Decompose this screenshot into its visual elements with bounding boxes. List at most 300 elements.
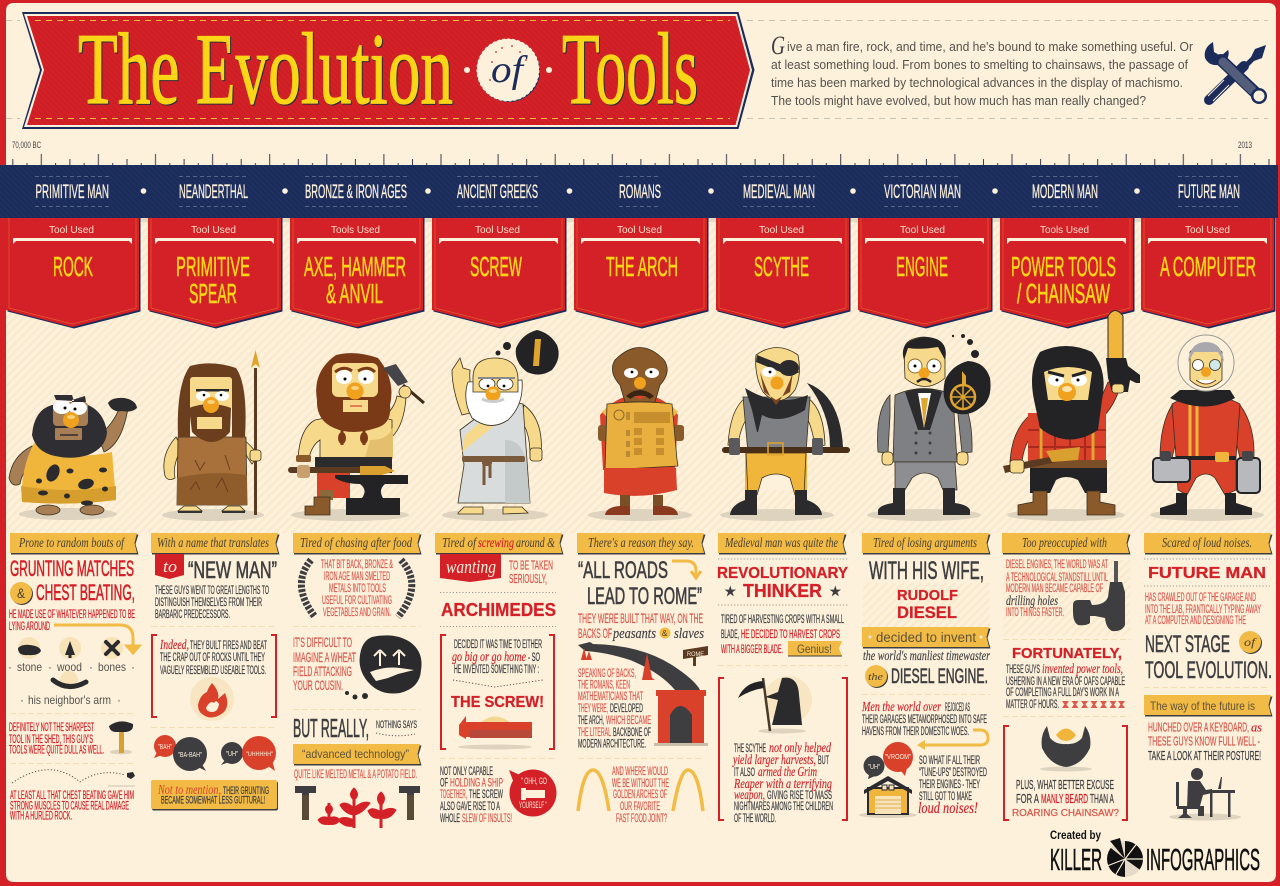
banner: rock: ROCK [53, 251, 93, 282]
column 2: neanderthal text [151, 533, 280, 810]
ribbon: genius: Genius! [797, 644, 832, 656]
icon: neighbor's arm [53, 671, 86, 689]
text: sharpest tool: DEFINITELY NOT THE SHARPEST [9, 722, 94, 734]
banner: axe hammer anvil [290, 218, 424, 328]
arrow [54, 625, 139, 653]
striped panel: rudolf diesel [863, 583, 990, 627]
wanting tag [440, 554, 501, 582]
text: insults: OF [440, 778, 448, 790]
paragraph: invented power tools, [1042, 662, 1123, 677]
labels: · [89, 660, 93, 674]
column 8: modern man text: A TECHNOLOGICAL STANDSTILL UNTIL [1006, 572, 1108, 584]
bracket panel: beard: PLUS, WHAT BETTER EXCUSE [1016, 777, 1114, 792]
bracket panel: grim reaper: BUT [818, 755, 829, 767]
script line: the world's manliest timewaster [863, 649, 990, 664]
labels: wood [56, 660, 82, 674]
bracket panel: grim reaper: THE SCYTHE [734, 743, 766, 755]
striped panel [1003, 560, 1130, 636]
intro text: ive a man fire, rock, and time, and he's bound to make something useful. Or [787, 39, 1194, 54]
callout: gutturals: BECAME SOMEWHAT LESS GUTTURAL! [161, 794, 265, 806]
ribbon [151, 533, 280, 554]
line: peasants and slaves: peasants [612, 626, 656, 642]
banner: screw: Tool Used [475, 224, 520, 236]
banner: axe hammer anvil: & ANVIL [326, 278, 383, 309]
ribbon: genius [788, 641, 842, 656]
text: wheat field: IMAGINE A WHEAT [293, 649, 356, 665]
speech bubbles: vroom [864, 742, 913, 779]
column 5: romans text: WHICH BECAME [606, 715, 651, 727]
ribbon: decided to invent: decided to invent [876, 630, 976, 645]
paragraph: STILL GOT TO MAKE [919, 791, 972, 803]
banner: the arch: THE ARCH [606, 251, 678, 282]
labels: stone [17, 660, 42, 674]
line: peasants and slaves [578, 625, 704, 642]
title text: tools: Tools [562, 13, 698, 126]
column 3: bronze and iron age text: VEGETABLES AND GRAIN. [323, 607, 391, 619]
character: medieval man [720, 348, 850, 521]
paragraph [919, 755, 987, 803]
labels: · [8, 660, 12, 674]
banner: primitive spear: SPEAR [189, 278, 237, 309]
column 5: romans text: BACKBONE OF [613, 727, 651, 739]
text: AT LEAST ALL THAT CHEST BEATING GAVE HIM [10, 790, 134, 802]
paragraph: WITH A BIGGER BLADE. [721, 644, 783, 656]
banner: screw: SCREW [470, 251, 522, 282]
heading: FORTUNATELY, [1012, 645, 1122, 662]
character: roman [588, 348, 692, 521]
of seal: of [491, 49, 528, 91]
bracket panel: the screw [441, 635, 554, 750]
logo [1107, 838, 1143, 880]
banner: scythe: Tool Used [759, 224, 804, 236]
banner: engine: Tool Used [900, 224, 945, 236]
column 5: romans text: WE BE WITHOUT THE [612, 778, 669, 790]
era navigation band: ROMANS [619, 182, 661, 203]
column 4: ancient greeks text [435, 533, 564, 825]
ribbon: way of the future [1144, 695, 1272, 716]
column 8: modern man text: MODERN MAN BECAME CAPABLE OF [1006, 583, 1103, 595]
arrow [672, 561, 701, 578]
character: victorian man [867, 334, 991, 521]
bracket panel: fire: THEY BUILT FIRES AND BEAT [190, 640, 267, 652]
icons: hourglasses [1062, 701, 1125, 708]
ribbon: way of the future: The way of the future is [1150, 699, 1255, 713]
bracket panel: grim reaper: IT ALSO [734, 767, 755, 779]
illustration: road on the backs of arches [578, 642, 708, 746]
column 6: medieval man text [717, 533, 849, 825]
bracket panel: grim reaper: NIGHTMARES AMONG THE CHILDREN [734, 801, 833, 813]
heading: ARCHIMEDES [441, 600, 556, 620]
ribbon [435, 533, 564, 554]
speech bubbles: grunts: "BA-BAH" [178, 752, 202, 759]
ribbon: With a name that translates [157, 536, 269, 551]
paragraph: THEY WERE, [578, 703, 608, 715]
title banner [22, 12, 754, 129]
paragraph: BLADE, [721, 629, 739, 641]
banner: rock: Tool Used [49, 224, 94, 236]
speech bubble: insult [509, 770, 556, 816]
banner: axe hammer anvil: AXE, HAMMER [304, 251, 406, 282]
paragraph [1148, 720, 1262, 763]
labels: bones [98, 660, 126, 674]
text: QUITE LIKE MELTED METAL & A POTATO FIELD. [294, 769, 417, 781]
bracket panel: grim reaper: not only helped [769, 741, 832, 756]
icon: fire [190, 677, 234, 721]
text: insults: ALSO GAVE RISE TO A [440, 801, 500, 813]
paragraph: OUR FAVORITE [620, 801, 660, 813]
speech bubbles: vroom: "VROOM" [885, 754, 911, 761]
text: insults: WHOLE [440, 813, 460, 825]
line: peasants and slaves: BACKS OF [578, 625, 612, 641]
to tag [155, 554, 184, 579]
era navigation band: VICTORIAN MAN [884, 182, 961, 203]
heading: THINKER [743, 581, 822, 601]
character: future man [1150, 335, 1264, 521]
text: SERIOUSLY, [509, 571, 547, 586]
column 3: bronze and iron age text: USEFUL FOR CULTIVATING [322, 595, 392, 607]
heading [10, 556, 135, 605]
icon: wood arrowhead [59, 637, 81, 659]
text: sharpest tool [9, 722, 104, 756]
intro text: G [771, 31, 785, 60]
paragraph: drilling holes [1006, 594, 1058, 609]
credit: created by killer infographics [1050, 830, 1260, 880]
bracket panel: grim reaper: Reaper with a terrifying [733, 777, 832, 792]
column 5: romans text: GOLDEN ARCHES OF [613, 789, 667, 801]
paragraph [321, 559, 393, 619]
character: primitive man [9, 395, 137, 520]
stars: ★ [829, 584, 842, 600]
ribbon: screwing [478, 536, 514, 551]
banner: primitive spear [148, 218, 282, 328]
the diesel engine [865, 665, 988, 688]
paragraph: SPEAKING OF BACKS, [578, 668, 636, 680]
ribbon [577, 533, 706, 554]
text: USHERING IN A NEW ERA OF OAFS CAPABLE [1006, 676, 1125, 688]
heading: next stage [1145, 631, 1272, 684]
speech bubbles: grunts: "BAH" [158, 744, 172, 751]
callout: gutturals [151, 780, 278, 810]
ribbon: There's a reason they say. [588, 536, 694, 551]
column 5: romans text: THEY WERE BUILT THAT WAY, ON THE [578, 610, 703, 626]
intro text: time has been marked by technological advances in the display of machismo. [771, 75, 1183, 90]
column 5: romans text: MODERN ARCHITECTURE. [578, 738, 646, 750]
ribbon: Prone to random bouts of [18, 536, 126, 551]
banner: the arch: Tool Used [617, 224, 662, 236]
heading: “NEW MAN” [188, 557, 277, 584]
ribbon: advanced technology: “advanced technology” [302, 747, 409, 761]
arm label: · [20, 693, 24, 707]
column 1: primitive man text [8, 533, 139, 822]
labels: · [131, 660, 135, 674]
of seal [464, 39, 552, 102]
bracket panel: fire: VAGUELY RESEMBLED USEABLE TOOLS. [160, 665, 266, 677]
bracket panel: the screw: THE SCREW! [451, 694, 544, 711]
tool banners [6, 218, 1276, 328]
icon: reaper [738, 676, 812, 734]
banner: engine: ENGINE [896, 251, 948, 282]
bracket panel: grim reaper [719, 676, 847, 825]
heading: REVOLUTIONARY [717, 565, 849, 582]
banner: primitive spear: PRIMITIVE [176, 251, 250, 282]
bracket panel: grim reaper: weapon, [734, 788, 765, 803]
stars [724, 584, 842, 600]
text: TO BE TAKEN [509, 558, 553, 572]
column 3: bronze and iron age text: BUT REALLY, [293, 713, 369, 743]
ribbon: decided to invent [862, 627, 990, 648]
icon: screw [458, 716, 532, 750]
of badge: of [1244, 635, 1257, 649]
ribbon: Medieval man was quite the [724, 536, 838, 551]
line: peasants and slaves: & [662, 629, 668, 638]
bracket panel: beard: THAN A [1090, 791, 1114, 806]
column 4: ancient greeks text: SLEW OF INSULTS! [462, 813, 512, 825]
text: insults: TOGETHER, [440, 789, 467, 801]
paragraph: BARBARIC PREDECESSORS. [155, 609, 230, 621]
column 5: romans text [577, 533, 708, 825]
icon: laurels [301, 560, 412, 617]
icon: crossed wrench and screwdriver [1205, 42, 1267, 104]
callout: gutturals: Not to mention, [157, 782, 221, 797]
banner: axe hammer anvil: Tools Used [331, 224, 380, 236]
speech bubble: insult: YOURSELF " [519, 800, 547, 811]
hurled rock path [12, 770, 135, 786]
banner: power tools chainsaw: Tools Used [1040, 224, 1089, 236]
heading [717, 565, 849, 601]
column 8: modern man text: DIESEL ENGINES, THE WORLD WAS AT [1006, 559, 1108, 571]
text: insults [440, 766, 512, 825]
character: bronze and iron age man [288, 353, 424, 521]
line: peasants and slaves: slaves [674, 626, 704, 642]
bracket panel: beard: ROARING CHAINSAW? [1012, 808, 1119, 819]
text: hurled rock [10, 790, 134, 822]
icon: stone [18, 637, 41, 659]
paragraph: MATTER OF HOURS. [1006, 699, 1059, 711]
banner: power tools chainsaw [1000, 218, 1134, 328]
title text: The Evolution [78, 13, 453, 126]
the diesel engine: DIESEL ENGINE. [891, 665, 988, 688]
column 7: victorian man text [859, 533, 990, 818]
banner: a computer [1141, 218, 1276, 328]
paragraph: THE ARCH, [578, 715, 604, 727]
era navigation band: PRIMITIVE MAN [36, 182, 109, 203]
timeline ruler: 2013 [1238, 140, 1252, 150]
paragraph [155, 585, 269, 621]
paragraph: Men the world over [861, 700, 941, 715]
credit: created by killer infographics: Created by [1050, 830, 1102, 842]
icon: golden arches [578, 770, 703, 811]
paragraph: THESE GUYS [1006, 664, 1040, 676]
icon: thought cloud with wheat and hare [345, 635, 422, 700]
striped panel: rudolf diesel: DIESEL [897, 603, 957, 622]
heading: GRUNTING MATCHES [10, 556, 134, 581]
paragraph: as [1251, 720, 1262, 734]
paragraph [1145, 592, 1261, 627]
speech bubble: insult: " OHH, GO [521, 776, 547, 787]
era navigation band: BRONZE & IRON AGES [305, 182, 407, 203]
paragraph: METALS INTO TOOLS [329, 583, 386, 595]
paragraph: REJOICED AS [945, 702, 970, 714]
paragraph: OF COMPLETING A FULL DAY'S WORK IN A [1006, 687, 1119, 699]
banner: scythe [716, 218, 850, 328]
text: sharpest tool: TOOL IN THE SHED, THIS GUY'S [9, 734, 93, 746]
banner: the arch [574, 218, 708, 328]
era navigation band: NEANDERTHAL [179, 182, 248, 203]
bracket panel: grim reaper: GIVING RISE TO MASS [767, 790, 832, 802]
text: hurled rock: WITH A HURLED ROCK. [10, 810, 72, 822]
bracket panel: the screw: DECIDED IT WAS TIME TO EITHER [454, 639, 542, 651]
column 1: primitive man text: TOOLS WERE QUITE DULL AS WELL. [9, 744, 104, 756]
paragraph: HAVENS FROM THEIR DOMESTIC WOES. [862, 726, 969, 738]
icon: stone hammer [109, 721, 133, 754]
intro text: The tools might have evolved, but how much has man really changed? [771, 93, 1146, 108]
paragraph: HE DECIDED TO HARVEST CROPS [741, 629, 840, 641]
column 3: bronze and iron age text: IRON AGE MAN SMELTED [324, 571, 390, 583]
nothing says [376, 719, 417, 736]
of badge [1239, 631, 1262, 654]
paragraph [721, 614, 844, 656]
ribbon [1002, 533, 1130, 554]
bracket panel: beard: FOR A [1016, 791, 1039, 806]
text [509, 558, 553, 586]
bracket panel: beard: MANLY BEARD [1041, 791, 1088, 806]
column 3: bronze and iron age text: THAT BIT BACK, BRONZE & [321, 559, 393, 571]
character: modern man [1003, 310, 1140, 521]
ribbon [10, 533, 138, 554]
stars: ★ [724, 584, 737, 600]
icon: garage [859, 776, 917, 818]
column 3: bronze and iron age text [293, 533, 422, 828]
callout: gutturals: THEIR GRUNTING [223, 785, 269, 797]
column 2: neanderthal text: THESE GUYS WENT TO GREAT LENGTHS TO [155, 585, 269, 597]
bracket panel: the screw: go big or go home [452, 649, 526, 664]
character: neanderthal [162, 350, 264, 521]
ribbon: Too preoccupied with [1022, 536, 1107, 551]
banner: a computer: Tool Used [1185, 224, 1230, 236]
paragraph [612, 766, 669, 825]
ribbon [718, 533, 846, 554]
bracket panel: fire [152, 635, 276, 721]
speech bubbles: grunts [154, 735, 276, 771]
paragraph: THE ROMANS, KEEN [578, 680, 630, 692]
text: insults: NOT ONLY CAPABLE [440, 766, 493, 778]
heading: FUTURE MAN [1148, 565, 1266, 582]
paragraph: THEIR ENGINES - THEY [919, 779, 980, 791]
labels [8, 660, 135, 674]
icon: hammers [295, 786, 420, 820]
striped panel: rudolf diesel: RUDOLF [897, 587, 958, 604]
heading: LEAD TO ROME” [587, 583, 702, 610]
arm label: · [117, 693, 121, 707]
banner: engine [858, 218, 992, 328]
ribbon: advanced technology [293, 744, 422, 766]
intro line [9, 609, 135, 633]
paragraph: MATHEMATICIANS THAT [578, 691, 643, 703]
icon: computer user silhouette [1169, 768, 1241, 820]
text: THEIR GARAGES METAMORPHOSED INTO SAFE [862, 714, 987, 726]
era navigation band [0, 165, 1278, 218]
arrow [917, 730, 988, 750]
column 5: romans text: FAST FOOD JOINT? [616, 813, 667, 825]
ribbon [1144, 533, 1272, 554]
intro text [771, 31, 1194, 108]
character: ancient greek [442, 330, 559, 521]
intro line: LYING AROUND [9, 621, 50, 633]
ribbon [862, 533, 990, 554]
bracket panel: the screw: HE INVENTED SOMETHING TINY : [454, 664, 539, 676]
arm label: his neighbor's arm [28, 693, 111, 707]
banner: primitive spear: Tool Used [191, 224, 236, 236]
bracket panel: grim reaper: yield larger harvests, [732, 753, 816, 768]
the diesel engine: the [868, 671, 883, 683]
text: TIRED OF HARVESTING CROPS WITH A SMALL [721, 614, 844, 626]
bracket panel: fire: THE CRAP OUT OF ROCKS UNTIL THEY [160, 652, 265, 664]
labels: · [48, 660, 52, 674]
paragraph [1006, 662, 1125, 711]
banner: rock [6, 218, 140, 328]
intro text: at least something loud. From bones to smelting to chainsaws, the passage of [771, 57, 1188, 72]
ribbon [293, 533, 422, 554]
icon: beard [1040, 726, 1092, 772]
ribbon: Tired of losing arguments [873, 536, 977, 551]
heading: CHEST BEATING, [36, 580, 135, 605]
banner: power tools chainsaw: / CHAINSAW [1017, 278, 1110, 309]
era navigation band: MODERN MAN [1032, 182, 1098, 203]
column 5: romans text: AND WHERE WOULD [612, 766, 668, 778]
banner: screw [432, 218, 566, 328]
paragraph: DEVELOPED [610, 703, 643, 715]
bracket panel: fire: Indeed, [159, 638, 189, 653]
speech bubbles: vroom: "UH" [868, 764, 880, 771]
banner: scythe: SCYTHE [754, 251, 809, 282]
text: insults: THE SCREW [469, 789, 503, 801]
column 3: bronze and iron age text: NOTHING SAYS [376, 719, 417, 731]
paragraph: THE LITERAL [578, 727, 611, 739]
paragraph: SO WHAT IF ALL THEIR [919, 755, 980, 767]
column 2: neanderthal text: DISTINGUISH THEMSELVES FROM THEIR [155, 597, 262, 609]
column 7: victorian man text: “TUNE-UPS” DESTROYED [919, 767, 987, 779]
timeline ruler [6, 140, 1276, 165]
credit: created by killer infographics: KILLER [1050, 842, 1102, 877]
bracket panel: grim reaper: armed the Grim [758, 765, 817, 780]
loud noises: loud noises! [918, 800, 978, 817]
speech bubbles: grunts: "UH" [226, 751, 238, 758]
text: insults: HOLDING A SHIP [450, 778, 503, 790]
paragraph [1006, 559, 1108, 619]
heading: “ALL ROADS [578, 557, 668, 584]
text: HE MADE USE OF WHATEVER HAPPENED TO BE [9, 609, 135, 621]
heading: WITH HIS WIFE, [869, 557, 984, 585]
icon: power drill [1073, 561, 1125, 631]
banner: power tools chainsaw: POWER TOOLS [1011, 251, 1116, 282]
icon: potato plants [318, 788, 396, 828]
text: wheat field [293, 634, 356, 693]
text: wheat field: IT'S DIFFICULT TO [293, 634, 352, 650]
paragraph [578, 668, 651, 750]
ribbon: Tired of [442, 536, 478, 551]
paragraph [861, 700, 987, 738]
column 1: primitive man text: STRONG MUSCLES TO CAUSE REAL DAMAGE [10, 800, 129, 812]
timeline ruler: 70,000 BC [12, 140, 41, 150]
column 9: future man text [1144, 533, 1272, 820]
ribbon: Tired of chasing after food [300, 536, 413, 551]
bracket panel: beard [1004, 726, 1127, 820]
era navigation band: MEDIEVAL MAN [743, 182, 815, 203]
bracket panel: the screw: - SO [528, 652, 540, 664]
bracket panel: grim reaper: OF THE WORLD. [734, 813, 776, 825]
speech bubbles: grunts: "UHHHHH" [246, 751, 274, 758]
heading: & [17, 585, 26, 601]
